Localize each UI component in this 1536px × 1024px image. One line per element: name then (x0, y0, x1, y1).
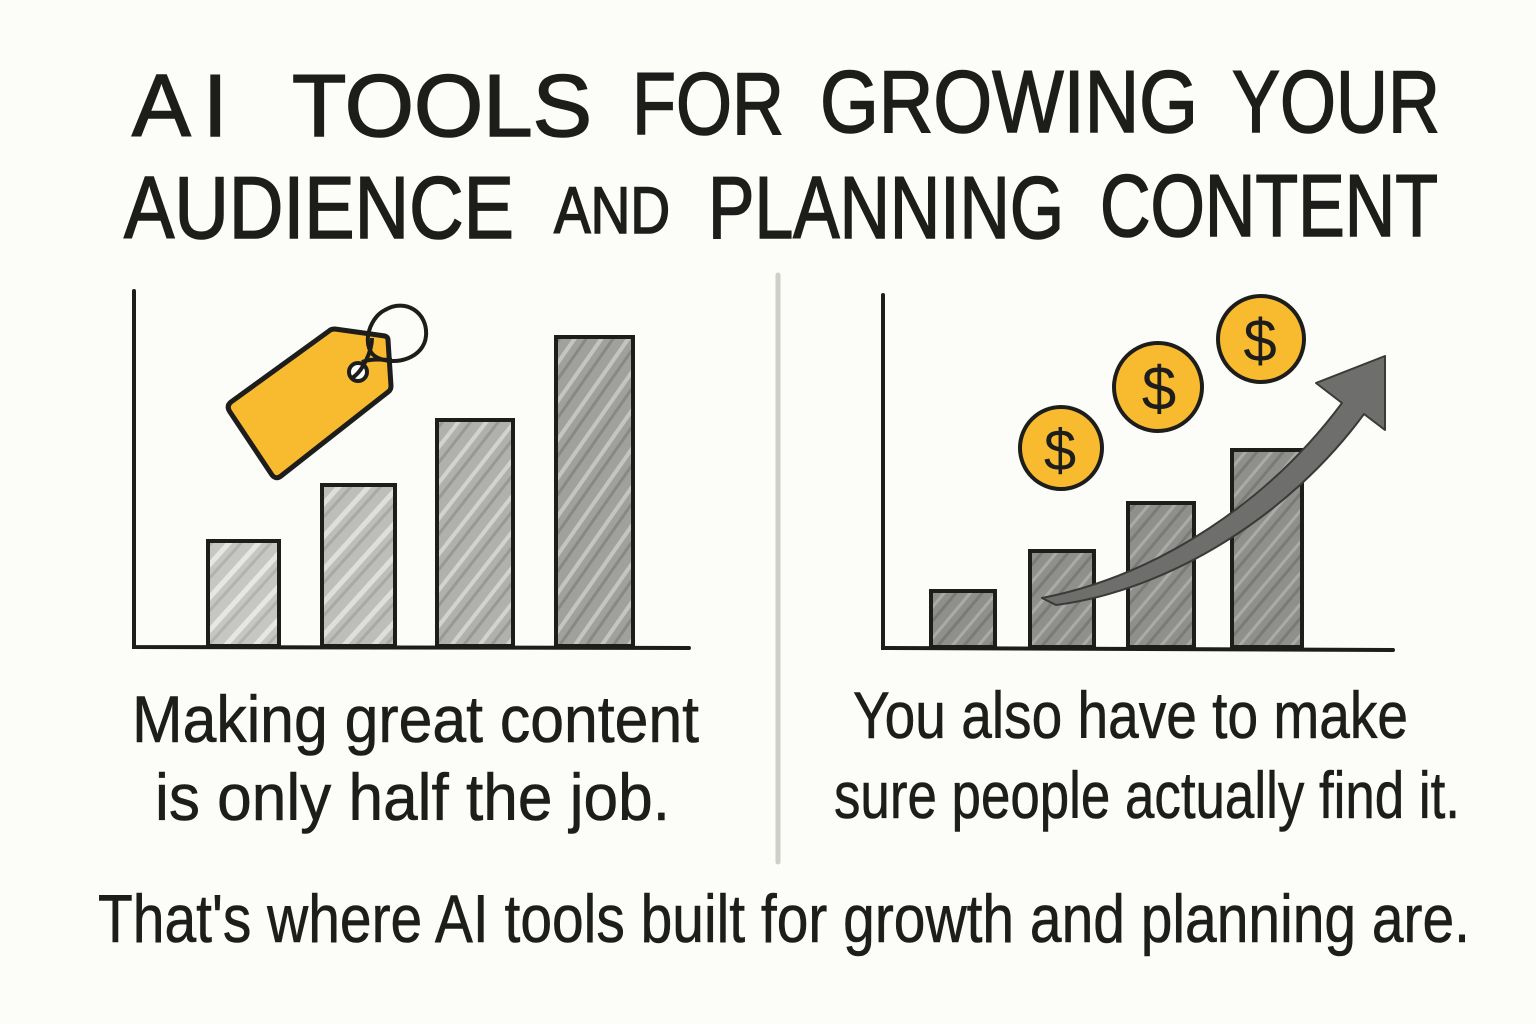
text: right caption (834, 678, 1460, 832)
bar 2 (1030, 551, 1094, 647)
text: left caption (132, 682, 699, 834)
title: AUDIENCE (124, 158, 514, 257)
text: right caption: You also have to make (853, 678, 1408, 752)
icon: coin 1: $ (1044, 418, 1076, 483)
bar 2 (322, 485, 395, 646)
axes (134, 291, 689, 648)
bar 3 (1128, 503, 1194, 647)
title (124, 52, 1440, 257)
icon: price tag (228, 306, 426, 478)
icon: coin 3 (1218, 296, 1304, 382)
text: left caption: Making great content (132, 682, 699, 756)
title: AI (132, 56, 227, 155)
title: TOOLS (292, 56, 592, 155)
axes (883, 295, 1393, 650)
bar 4 (556, 337, 633, 646)
icon: coin 3: $ (1243, 307, 1277, 374)
panel: right chart (883, 295, 1393, 650)
bar 1 (208, 541, 279, 646)
bar 1 (931, 591, 995, 647)
bar 3 (437, 420, 513, 646)
text: left caption: is only half the job. (155, 760, 670, 834)
panel: left chart (134, 291, 689, 648)
divider (776, 275, 780, 862)
title: AND (554, 173, 670, 247)
bar 4 (1232, 450, 1302, 647)
icon: coin 2 (1114, 343, 1202, 431)
title: CONTENT (1100, 156, 1438, 255)
title: FOR (632, 54, 784, 153)
arrow: growth (1042, 356, 1385, 605)
title: GROWING (820, 52, 1198, 151)
icon: coin 1 (1020, 407, 1102, 489)
icon: coin 2: $ (1142, 355, 1176, 424)
title: YOUR (1232, 52, 1440, 151)
title: PLANNING (708, 158, 1064, 257)
